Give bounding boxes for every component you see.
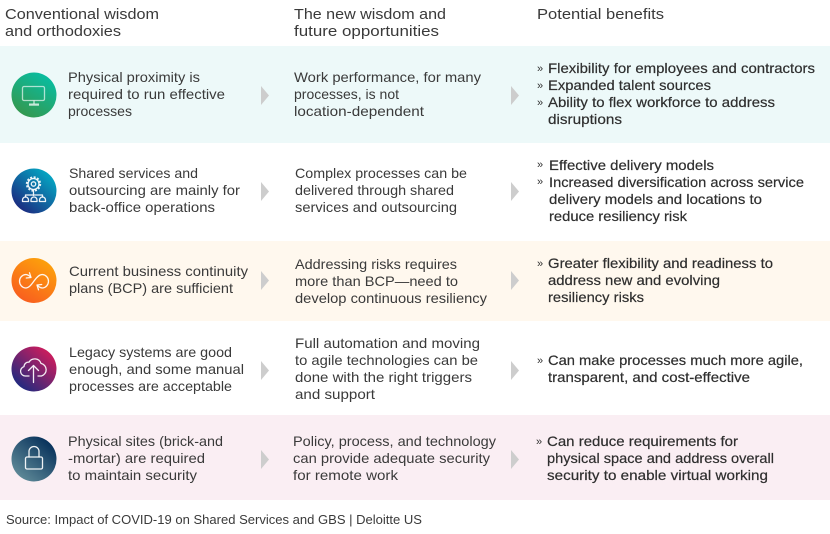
text: new wisdom: can provide adequate security xyxy=(293,450,490,466)
text: conventional wisdom xyxy=(69,165,240,215)
text: conventional wisdom: to maintain security xyxy=(68,467,197,483)
arrow xyxy=(511,182,519,201)
text: new wisdom: for remote work xyxy=(293,467,399,483)
text: new wisdom: delivered through shared xyxy=(295,182,454,198)
text: benefits: Increased diversification across service xyxy=(549,174,804,190)
arrow xyxy=(261,182,269,201)
text: new wisdom: more than BCP—need to xyxy=(295,273,458,289)
text: new wisdom xyxy=(295,256,487,306)
icon: padlock xyxy=(12,436,56,482)
icon: infinity loop arrows xyxy=(12,258,56,303)
text: conventional wisdom xyxy=(68,69,225,119)
panel: row 1 physical proximity xyxy=(0,46,830,143)
icon: gear with org chart xyxy=(12,168,56,214)
text: new wisdom: Complex processes can be xyxy=(295,165,467,181)
icon: cloud upload xyxy=(12,346,56,392)
text: benefits: » xyxy=(537,63,543,75)
text: new wisdom xyxy=(294,69,481,119)
text: benefits: » xyxy=(537,97,543,109)
text: new wisdom: processes, is not xyxy=(294,86,399,102)
text: new wisdom: location-dependent xyxy=(294,103,424,119)
text: conventional wisdom: Physical sites (brick-and xyxy=(68,433,223,449)
heading: new wisdom column xyxy=(294,7,446,40)
text: benefits: Effective delivery models xyxy=(549,157,714,173)
text: benefits: » xyxy=(537,258,543,270)
text: benefits: physical space and address overall xyxy=(547,450,774,466)
arrow xyxy=(261,450,269,469)
text: benefits: » xyxy=(536,436,542,448)
text: conventional wisdom: Current business continuity xyxy=(69,263,248,279)
text: conventional wisdom: back-office operations xyxy=(69,199,215,215)
text: conventional wisdom: processes xyxy=(68,103,132,119)
text: new wisdom: and support xyxy=(295,386,375,402)
heading: potential benefits column: Potential benefits xyxy=(537,7,664,23)
text: conventional wisdom: enough, and some manual xyxy=(69,361,244,377)
text: benefits: Greater flexibility and readiness to xyxy=(548,255,773,271)
text: new wisdom: develop continuous resiliency xyxy=(295,290,487,306)
text: benefits: security to enable virtual working xyxy=(547,467,768,483)
text: new wisdom xyxy=(293,433,496,483)
text: benefits: » xyxy=(537,80,543,92)
text: benefits: Expanded talent sources xyxy=(548,77,711,93)
source note: Source: Impact of COVID-19 on Shared Services and GBS | Deloitte US xyxy=(6,512,422,527)
panel: row 2 shared services xyxy=(0,143,830,241)
heading: new wisdom column: The new wisdom and xyxy=(294,7,446,23)
panel: row 5 physical sites xyxy=(0,415,830,500)
text: new wisdom: to agile technologies can be xyxy=(295,352,478,368)
text: benefits: delivery models and locations to xyxy=(549,191,762,207)
text: conventional wisdom: Shared services and xyxy=(69,165,198,181)
heading: new wisdom column: future opportunities xyxy=(294,24,439,40)
text: benefits: reduce resiliency risk xyxy=(549,208,688,224)
text: conventional wisdom xyxy=(69,263,248,296)
text: conventional wisdom xyxy=(69,344,244,394)
arrow xyxy=(261,271,269,290)
text: new wisdom: done with the right triggers xyxy=(295,369,472,385)
text: new wisdom xyxy=(295,165,467,215)
text: benefits: » xyxy=(537,159,543,171)
arrow xyxy=(511,450,519,469)
text: benefits xyxy=(537,255,773,305)
text: benefits: Can make processes much more agile, xyxy=(548,352,803,368)
text: benefits xyxy=(537,157,804,224)
text: benefits: transparent, and cost-effective xyxy=(548,369,750,385)
text: new wisdom: Full automation and moving xyxy=(295,335,480,351)
text: new wisdom: services and outsourcing xyxy=(295,199,457,215)
text: benefits: » xyxy=(537,355,543,367)
text: conventional wisdom: Physical proximity is xyxy=(68,69,200,85)
text: benefits xyxy=(537,60,815,127)
text: benefits: address new and evolving xyxy=(548,272,720,288)
text: benefits xyxy=(536,433,774,483)
text: benefits xyxy=(537,352,803,385)
panel: row 3 business continuity xyxy=(0,241,830,321)
text: conventional wisdom: outsourcing are mainly for xyxy=(69,182,240,198)
text: conventional wisdom: required to run effective xyxy=(68,86,225,102)
text: conventional wisdom: -mortar) are required xyxy=(68,450,205,466)
text: conventional wisdom xyxy=(68,433,223,483)
text: benefits: Ability to flex workforce to address xyxy=(548,94,775,110)
text: new wisdom: Addressing risks requires xyxy=(295,256,457,272)
icon: computer monitor xyxy=(12,72,56,118)
text: conventional wisdom: processes are acceptable xyxy=(69,378,232,394)
arrow xyxy=(511,86,519,105)
text: new wisdom xyxy=(295,335,480,402)
heading: conventional wisdom column xyxy=(5,7,159,40)
text: benefits: disruptions xyxy=(548,111,622,127)
text: new wisdom: Work performance, for many xyxy=(294,69,481,85)
heading: conventional wisdom column: and orthodoxies xyxy=(5,24,121,40)
text: benefits: resiliency risks xyxy=(548,289,644,305)
text: benefits: » xyxy=(537,176,543,188)
arrow xyxy=(261,86,269,105)
arrow xyxy=(261,361,269,380)
panel: row 4 legacy systems xyxy=(0,321,830,415)
text: conventional wisdom: plans (BCP) are sufficient xyxy=(69,280,233,296)
text: new wisdom: Policy, process, and technology xyxy=(293,433,496,449)
heading: conventional wisdom column: Conventional wisdom xyxy=(5,7,159,23)
arrow xyxy=(511,271,519,290)
text: benefits: Can reduce requirements for xyxy=(547,433,738,449)
arrow xyxy=(511,361,519,380)
text: conventional wisdom: Legacy systems are good xyxy=(69,344,232,360)
text: benefits: Flexibility for employees and contractors xyxy=(548,60,815,76)
